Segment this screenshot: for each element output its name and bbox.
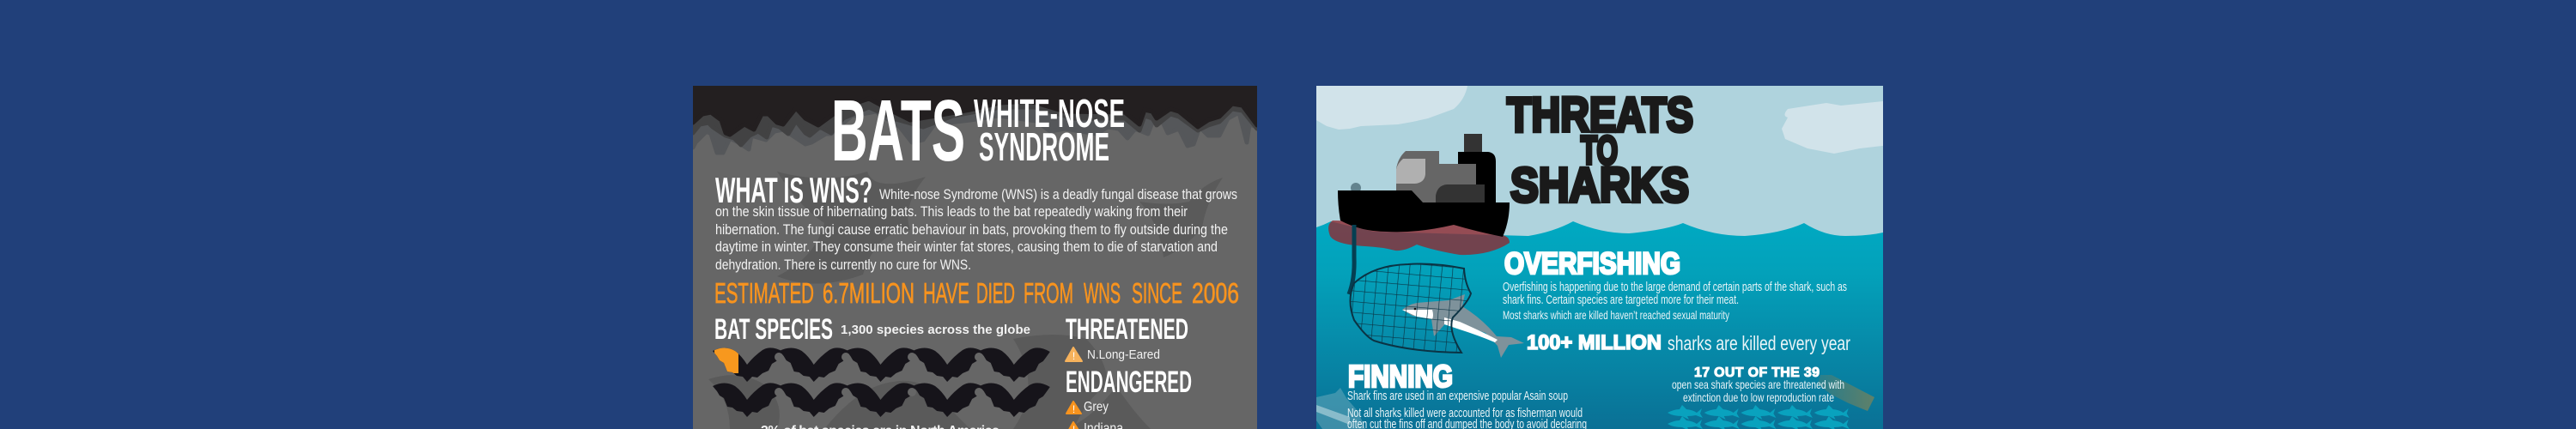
icon: warning grey [1066,402,1081,415]
text block: open sea sharks [1672,378,1844,404]
text block: WNS description: on the skin tissue of hibernating bats. This leads to the bat repeatedly waking from their [715,203,1188,220]
heading: endangered: ENDANGERED [1066,366,1192,399]
icon: warning light [1066,347,1082,362]
pictogram: shark icons [1668,405,1850,429]
blood slick [1328,221,1510,255]
callout: estimated deaths: 2006 [1192,277,1239,309]
heading: threats to sharks [1507,88,1693,213]
callout: estimated deaths: DIED [976,277,1015,309]
text: Grey: Grey [1084,400,1109,414]
heading: threats to sharks: THREATS [1507,88,1693,142]
net outline [1350,264,1471,353]
callout: estimated deaths: 6.7MILION [823,277,914,309]
subtitle: white-nose syndrome [974,100,1124,161]
ship funnel top [1464,134,1482,153]
ship [1338,134,1510,237]
text block: open sea sharks: extinction due to low reproduction rate [1683,390,1834,404]
text block: open sea sharks: open sea shark species are threatened with [1672,378,1844,391]
icon: warning light: ! [1072,350,1075,362]
callout: estimated deaths [715,282,1238,304]
illustration: shark in net [1348,262,1524,358]
pictogram: bat species icons [713,347,1050,417]
cloud left [1316,86,1467,130]
ship lower cabin [1436,184,1485,202]
text block: finning description: Shark fins are used in an expensive popular Asain soup [1347,389,1568,403]
stat: 17 out of the 39: 17 OUT OF THE 39 [1694,366,1820,380]
subtitle: white-nose syndrome: WHITE-NOSE [974,91,1125,136]
title: BATS: BATS [831,83,965,179]
text block: WNS description: hibernation. The fungi cause erratic behaviour in bats, provoking them to fly outside during the [715,221,1228,238]
shark body [1402,294,1524,358]
text: N.Long-Eared: N.Long-Eared [1087,347,1160,362]
ship funnel [1458,152,1496,206]
bat row 2 [713,383,1050,417]
faint shark [1316,388,1365,429]
stat: 100+ million: sharks are killed every year [1668,332,1850,354]
heading: threats to sharks: TO [1581,128,1618,172]
text block: WNS description: White-nose Syndrome (WNS) is a deadly fungal disease that grows [879,186,1237,202]
heading: threats to sharks: SHARKS [1510,158,1689,213]
stat: 100+ million: 100+ MILLION [1527,331,1662,354]
text: species count: 1,300 species across the globe [841,323,1030,337]
heading: threatened: THREATENED [1066,313,1188,346]
icon: warning grey: ! [1072,403,1075,415]
text block: finning description [1347,389,1587,429]
text block: overfishing description: Overfishing is happening due to the large demand of certain parts of the shark, such as [1503,280,1847,294]
ship mast [1351,183,1361,190]
detached fin [1818,375,1874,411]
panel: bats white-nose syndrome [693,83,1257,429]
text block: overfishing description: shark fins. Certain species are targeted more for their meat. [1503,293,1739,307]
text block: WNS description: dehydration. There is currently no cure for WNS. [715,257,971,273]
text block: overfishing description [1503,280,1847,322]
panel: threats to sharks [1316,86,1883,429]
shark belly [1402,310,1498,342]
background bat silhouettes [708,172,1223,429]
cloud right [1782,101,1883,154]
shark eye [1414,308,1416,310]
heading: what is WNS: WHAT IS WNS? [715,170,872,210]
stat: 100+ million [1527,331,1850,354]
fishing rope [1349,225,1354,294]
sky [1316,86,1883,236]
cave ceiling layers [693,86,1257,153]
callout: estimated deaths: FROM [1024,277,1073,309]
icon: warning indiana [1068,421,1078,429]
highlighted partial bat [714,348,738,373]
text block: WNS description: daytime in winter. They consume their winter fat stores, causing them to die of starvation and [715,239,1218,255]
heading: finning: FINNING [1348,359,1453,394]
sea with waves [1316,221,1883,429]
bat heads [775,353,983,396]
heading: overfishing: OVERFISHING [1504,247,1680,281]
text block: finning description: Not all sharks killed were accounted for as fisherman would [1347,406,1583,420]
ship cabin [1396,151,1476,206]
heading: bat species: BAT SPECIES [714,313,833,346]
text block: overfishing description: Most sharks which are killed haven’t reached sexual maturity [1503,308,1729,322]
callout: estimated deaths: ESTIMATED [714,277,814,309]
callout: estimated deaths: WNS [1084,277,1121,309]
bat row 1 [713,347,1050,382]
panel background [693,86,1257,429]
ship hull [1338,190,1510,237]
callout: estimated deaths: HAVE [923,277,969,309]
net mesh [1348,262,1473,354]
ship window [1396,159,1425,184]
text block: WNS description [715,186,1237,273]
subtitle: white-nose syndrome: SYNDROME [979,124,1109,169]
callout: estimated deaths: SINCE [1132,277,1182,309]
